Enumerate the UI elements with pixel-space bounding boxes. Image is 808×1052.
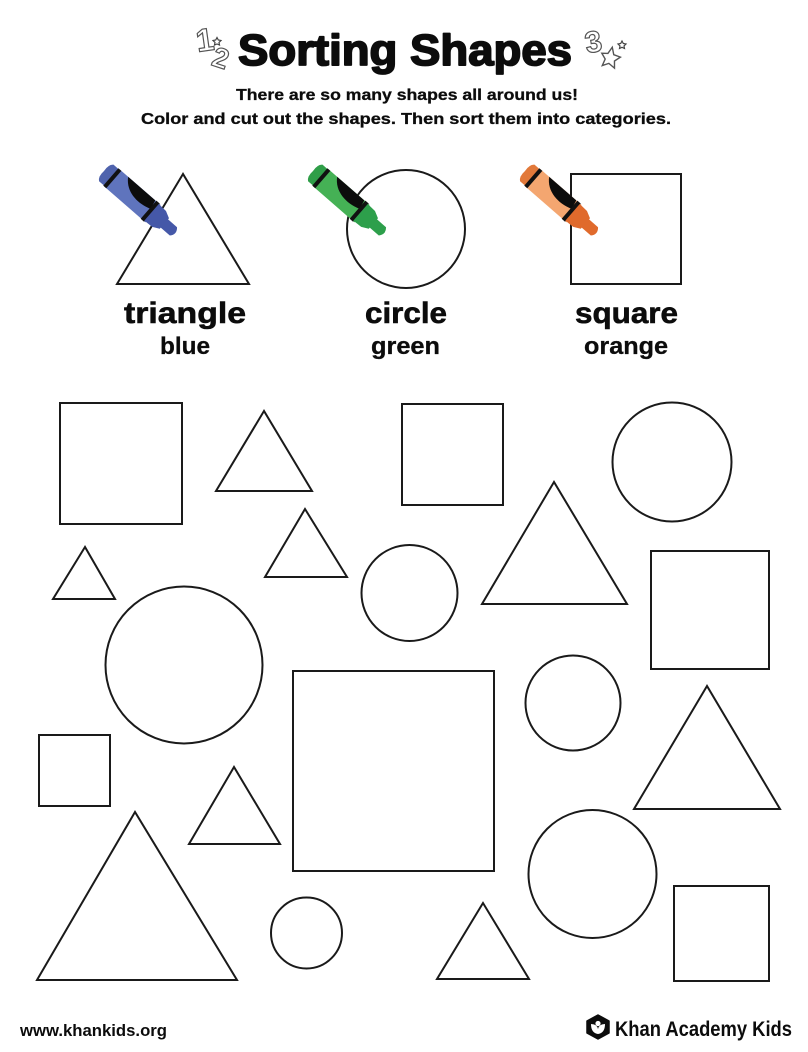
subtitle: Color and cut out the shapes. Then sort them into categories. xyxy=(141,111,671,128)
label: triangle xyxy=(124,297,246,330)
icon: green crayon xyxy=(305,162,392,242)
shapes: triangles xyxy=(37,411,780,980)
icon: numbers and star left of title xyxy=(194,21,233,75)
panel: triangle example xyxy=(96,162,249,360)
icon: orange crayon xyxy=(517,162,604,242)
icon: blue crayon xyxy=(96,162,183,242)
icon: numbers and star left of title: 2 xyxy=(208,41,233,75)
panel: square example xyxy=(517,162,681,360)
title: Sorting Shapes xyxy=(238,26,572,75)
subtitle xyxy=(141,87,671,128)
shapes: circles xyxy=(106,402,732,968)
label: colour: green xyxy=(371,333,440,360)
footer logo: Khan Academy Kids xyxy=(587,1015,792,1041)
label: square xyxy=(575,297,678,330)
icon: number and stars right of title xyxy=(582,25,626,69)
icon: numbers and star left of title: 1 xyxy=(194,21,216,59)
shapes: squares xyxy=(39,403,769,981)
panel: shapes to sort xyxy=(37,402,780,981)
icon: logo hexagon xyxy=(587,1015,609,1039)
panel: circle example xyxy=(305,162,465,360)
footer url: www.khankids.org xyxy=(19,1021,167,1040)
label: circle xyxy=(365,297,447,330)
icon: number and stars right of title: 3 xyxy=(582,25,605,60)
label: colour: blue xyxy=(160,333,210,360)
subtitle: There are so many shapes all around us! xyxy=(236,87,578,104)
label: colour: orange xyxy=(584,333,668,360)
